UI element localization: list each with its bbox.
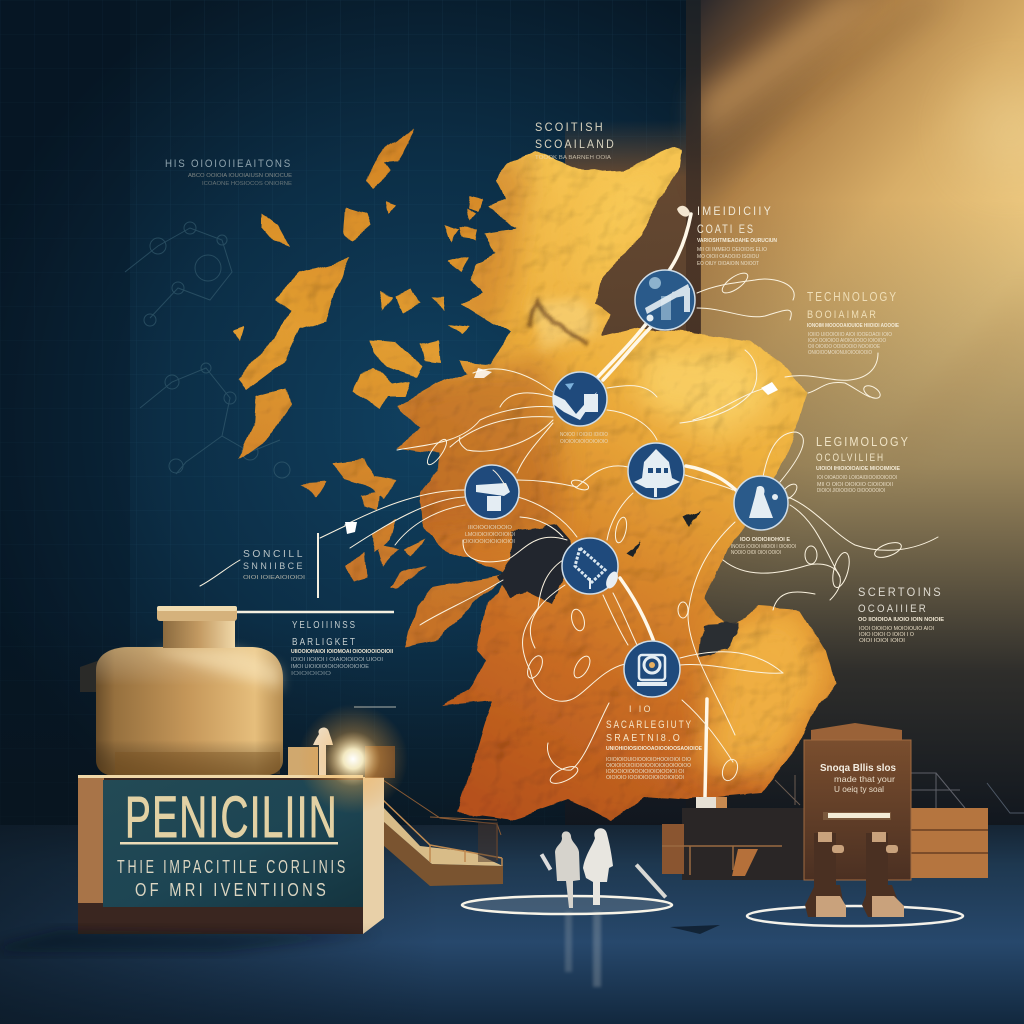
subtitle	[117, 857, 348, 900]
text block: yeloiiinss: IOIOI IIOIIOI I OIAIOIOIOOI UIOOI	[291, 657, 383, 663]
text block: historical label	[165, 158, 293, 187]
text block: Scottish Scotland: SCOAILAND	[535, 137, 616, 151]
text block: historical label: ICOAONE HOSIOCOS ONIORNE	[202, 181, 293, 187]
text block: technology: BOOIAIMAR	[807, 309, 878, 321]
text block: historical label: HIS OIOIOIIEAITONS	[165, 158, 292, 170]
foreground floor shadow	[0, 925, 720, 952]
text block: sacarlegiuty	[606, 704, 702, 781]
caption below flask node: IOO OIOIOIIOHOI E	[740, 537, 790, 543]
text block: sacarlegiuty: OIOIOIO IOOIOIOOIOIOOIOIOOI	[606, 775, 684, 781]
captions on the map: LMOIOIOIOIOOIOIOI	[465, 532, 515, 538]
figure and crate on pedestal with lamp glow	[288, 704, 408, 814]
text block: sacarlegiuty: IOIOIOIOUIOIOOIOIOHOOIOIOI OIO	[606, 757, 691, 763]
text block: historical label: ABCO OOIOIA IOUOIAIUSN ONIOCUE	[188, 173, 293, 179]
text block: medicity coatess: VARIOSHTMIEAOAHE OURUCIUN	[697, 238, 777, 244]
caption below flask node	[731, 537, 796, 556]
floor	[0, 825, 1024, 1024]
text block: Scottish Scotland	[535, 120, 616, 161]
text block: yeloiiinss: BARLIGKET	[292, 637, 357, 648]
background: golden light panel with sun rays	[686, 0, 1024, 830]
icon node: building	[628, 443, 684, 499]
text block: technology: OII OIOIOO OOIOOOIO NOOIOOE	[808, 344, 881, 350]
monument box with text and machines: Snoqa Bllis slos	[820, 763, 896, 774]
caption below flask node: NOOIO OIOI OIOI OOIOI	[731, 550, 781, 556]
captions on the map: IIIOIOOIOIOOIO	[468, 525, 512, 531]
map: outer islands	[232, 128, 507, 647]
connecting lines with leaf loops	[200, 206, 938, 797]
low table and crates	[662, 773, 1024, 880]
text block: technology: IONOIM MOOOOAIOUIOE HIIOIOI AOOOIE	[807, 323, 899, 329]
text block: Scottish Scotland: TOOOK BA BARNEH OOIA	[535, 155, 612, 161]
ring under machines	[747, 906, 963, 926]
text block: technology	[807, 289, 899, 356]
text block: sacarlegiuty: OIOIOIOOIOIOIOIOOIOIOIOOIOOIOO	[606, 763, 691, 769]
accent rules	[237, 533, 396, 707]
text block: scertoins: IOIO IOIOI O IOIOI I O	[859, 632, 914, 638]
text block: soncill	[243, 549, 305, 581]
text block: medicity coatess: MO OIOII OIAOOIO ISOIOU	[697, 254, 759, 260]
text block: scertoins: OCOAIIIER	[858, 603, 928, 615]
text block: soncill: SNNIIBCE	[243, 561, 305, 571]
text block: legimology: UIOIOI IHIOIOIOAIOE MIOOIMIOIE	[816, 466, 900, 472]
text block: legimology: MII O OIOI OIOIOIO CIOIOIIOII	[817, 482, 893, 488]
map: sea lochs and firths	[498, 510, 738, 656]
text block: medicity coatess: IMEIDICIIY	[697, 204, 773, 218]
icon node: tree diagram	[562, 538, 620, 594]
text block: yeloiiinss	[291, 620, 393, 677]
text block: medicity coatess: COATI ES	[697, 222, 755, 236]
subtitle: THIE IMPACITILE CORLINIS	[117, 857, 348, 877]
text block: scertoins: OO IIOIOIOA IUOIO IOIN NOIOIE	[858, 617, 944, 623]
pedestal with title panel	[78, 775, 384, 934]
text block: scertoins: IOOI OIOIOIO MOIOIOUIO AIOI	[859, 626, 934, 632]
people on ring	[462, 828, 672, 987]
text block: legimology: DIOIOI JIOIOOIOO OIOOOOOIOI	[817, 488, 885, 494]
icon node: bridge engineering	[635, 270, 695, 330]
staircase on the left	[383, 780, 503, 886]
text block: yeloiiinss: IOIOIOIOIO	[291, 671, 331, 677]
text block: yeloiiinss: YELOIIINSS	[292, 620, 357, 631]
monument box with text and machines: U oeiq ty soal	[834, 784, 884, 794]
text block: medicity coatess: EO OIUY OIOAIOIN NOIOOT	[697, 261, 759, 267]
text block: soncill: OIOI IOIEAIOIOIOI	[243, 575, 305, 581]
captions on the map: OIOIOOIOIOIOIOIOI	[463, 539, 515, 545]
map: Scottish mainland	[390, 147, 835, 820]
text block: technology: IOIO OOIOIOO AIOIOUOOO IOIOIOO	[808, 338, 886, 344]
text block: technology: ONIOIOOMOIONUIOIOOIOOIO	[808, 350, 872, 356]
text block: sacarlegiuty: SRAETNI8.O	[606, 733, 682, 744]
text block: legimology	[816, 434, 910, 494]
captions on the map: OIOIOIOIOIOOIOIOIO	[560, 439, 608, 445]
text block: legimology: LEGIMOLOGY	[816, 434, 910, 449]
text block: sacarlegiuty: IOIOOIOIOIOOIOIOIOIOOIOI OI	[606, 769, 684, 775]
captions on the map: NOIOO I OIOIO IOIOIO	[560, 432, 608, 438]
background: navy tartan panel	[0, 0, 705, 830]
text block: scertoins	[858, 585, 944, 644]
text block: yeloiiinss: UIIOOIOHAIOI IOIOMOAI OIOOIOOIOOIOII	[291, 649, 393, 655]
icon node: basin	[465, 465, 519, 519]
title: penicillin: PENICILIIN	[125, 785, 338, 850]
text block: medicity coatess: MII OI IMMEIO OEIOIOIS ELIO	[697, 247, 767, 253]
monument box with text and machines	[747, 723, 963, 926]
text block: sacarlegiuty: I IO	[629, 704, 653, 714]
caption below flask node: INOOS IOOIOI MIOIOI I OIOIOOI	[731, 544, 796, 550]
monument box with text and machines: made that your	[834, 774, 895, 784]
text block: Scottish Scotland: SCOITISH	[535, 120, 605, 134]
text block: yeloiiinss: IMOI UIOIOIOIOIOIOOIOIOIOE	[291, 664, 370, 670]
network diagrams on the left wall	[125, 222, 290, 478]
text block: sacarlegiuty: SACARLEGIUTY	[606, 719, 693, 731]
penicillin jar	[80, 606, 283, 776]
background: brown sea east of the highlands	[565, 120, 705, 830]
text block: soncill: SONCILL	[243, 549, 305, 560]
text block: technology: TECHNOLOGY	[807, 289, 898, 304]
icon node: machine	[553, 372, 607, 426]
text block: scertoins: OIOI IOIOI IOIOI	[859, 638, 905, 644]
icon node: flask figure	[734, 476, 788, 530]
text block: legimology: OCOLVILIEH	[816, 452, 885, 464]
text block: technology: IOIIO UIOOIOIIO AIOI IOOEOAOI IOIO	[808, 332, 892, 338]
subtitle: OF MRI IVENTIIONS	[135, 880, 329, 900]
text block: scertoins: SCERTOINS	[858, 585, 943, 599]
captions on the map	[463, 432, 608, 545]
text block: sacarlegiuty: UNIOHIOIOSIOIOOAOIOOIOOSAOIOIOE	[606, 746, 702, 752]
text block: medicity coatess	[697, 204, 777, 267]
icon node: scanner	[624, 641, 680, 697]
text block: legimology: IOI OIOAOOIO LOIOAIOIOOIOOIOOOI	[817, 475, 897, 481]
